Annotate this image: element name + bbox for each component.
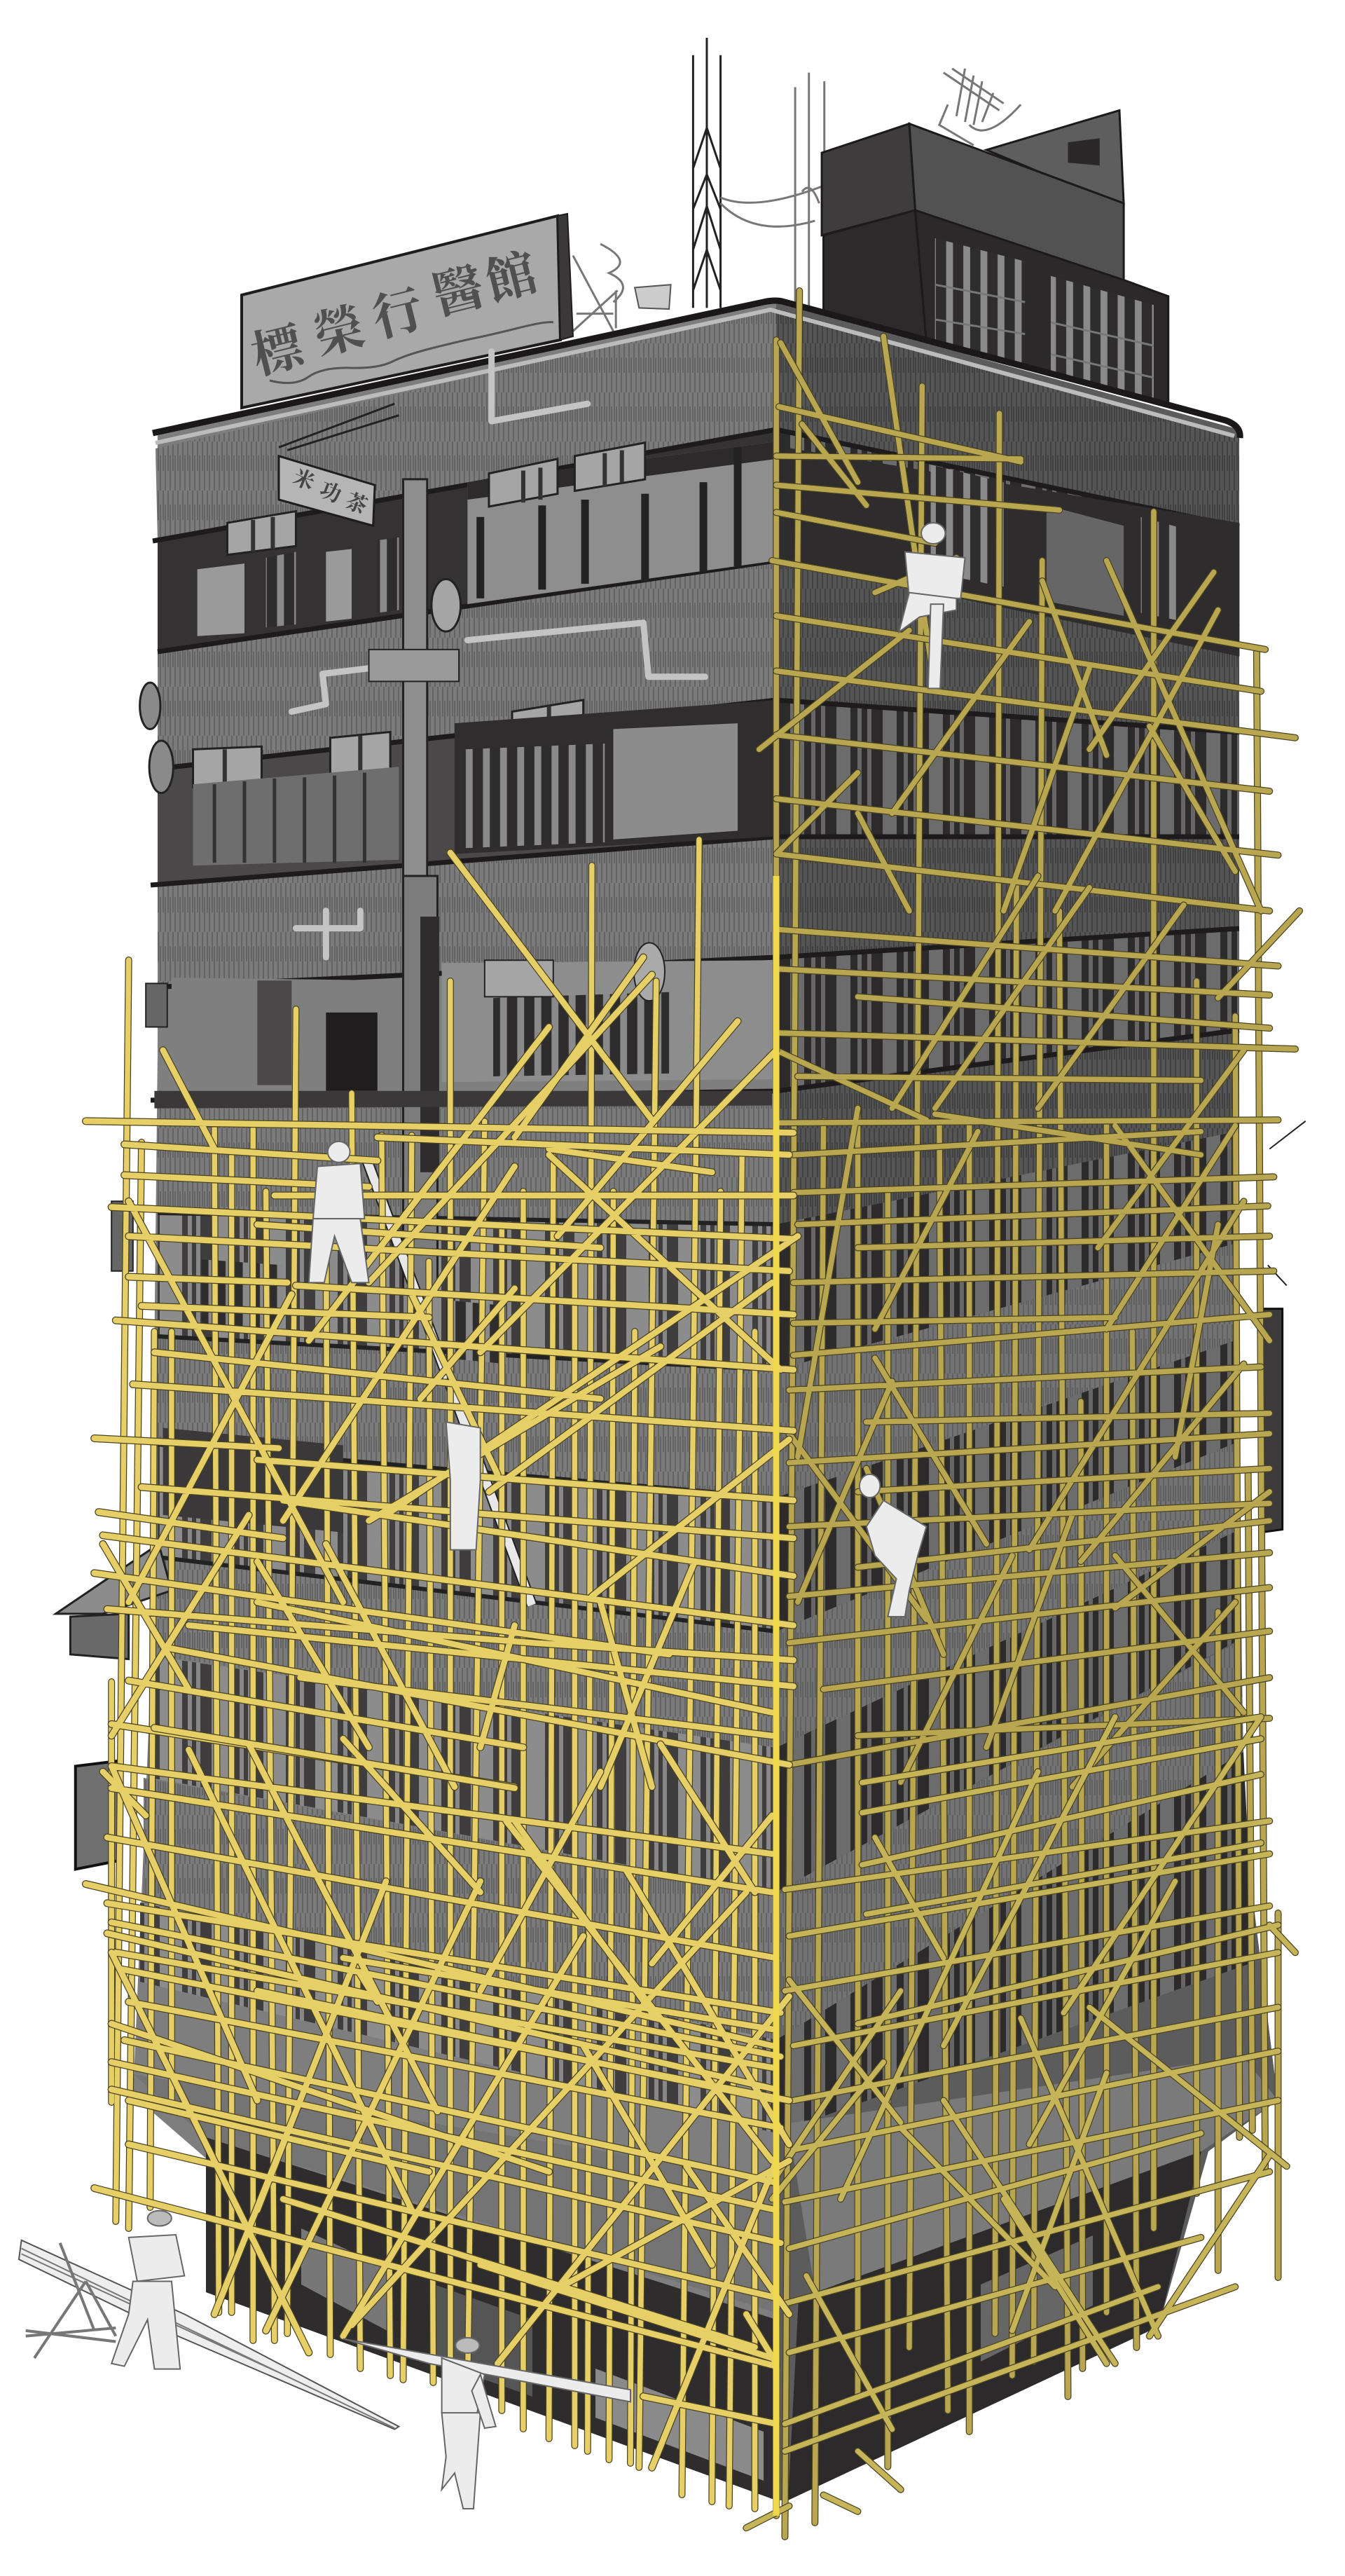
bamboo scaffold: right face	[746, 291, 1299, 2537]
building: left facade	[133, 302, 776, 2500]
worker: ground carrying bamboo	[343, 2338, 630, 2509]
left face middle poles	[85, 853, 798, 1787]
corner standard	[773, 876, 779, 2516]
rooftop signboard	[242, 214, 573, 408]
left side shed	[56, 1544, 172, 1659]
hanging sign lettering: 米	[289, 465, 318, 495]
mid facade details	[111, 876, 772, 1533]
sign lettering: 標	[247, 317, 312, 385]
sign lettering	[247, 245, 543, 385]
rooftop masts and wires	[573, 38, 1021, 331]
rooftop water tank block	[822, 111, 1168, 406]
hanging shop sign	[279, 404, 399, 526]
sign lettering: 行	[367, 281, 429, 348]
sign lettering: 醫	[427, 259, 490, 325]
worker: left face middle	[446, 1422, 481, 1550]
wall pipes	[291, 352, 705, 712]
left face vertical poles	[111, 840, 755, 2509]
right face middle poles	[776, 876, 1299, 1787]
sign lettering: 榮	[308, 299, 371, 365]
left face lower poles	[85, 1728, 789, 2467]
wall and window bands	[156, 308, 776, 541]
worker: left face upper	[309, 1142, 369, 1282]
right face upper poles	[759, 343, 1295, 911]
bamboo bundle and tripod on the ground	[19, 2240, 399, 2430]
air conditioners	[193, 443, 645, 787]
hanging sign lettering	[289, 465, 371, 519]
worker: top right	[899, 523, 965, 688]
right face vertical poles	[776, 291, 1278, 2537]
satellite dishes on left wall	[140, 683, 173, 793]
white ladder	[367, 1160, 532, 1605]
upper facade details	[140, 352, 1239, 912]
building: right facade	[776, 302, 1278, 2500]
street pole	[369, 479, 461, 912]
right side dark panel	[1261, 1121, 1306, 1533]
left side hanging sign	[76, 1761, 120, 1869]
second floor window band	[193, 700, 776, 865]
hanging sign lettering: 茶	[342, 489, 371, 519]
right facade window shading	[776, 447, 1239, 657]
worker: ground left	[111, 2211, 184, 2369]
bamboo scaffold: left face	[85, 840, 798, 2516]
hanging sign lettering: 功	[316, 478, 345, 507]
roof parapet lines	[151, 301, 1240, 1631]
sign lettering: 館	[481, 245, 543, 311]
right face lower poles	[746, 1717, 1295, 2528]
worker: right face climbing	[860, 1474, 926, 1617]
windows, left facade top floor	[198, 441, 776, 636]
